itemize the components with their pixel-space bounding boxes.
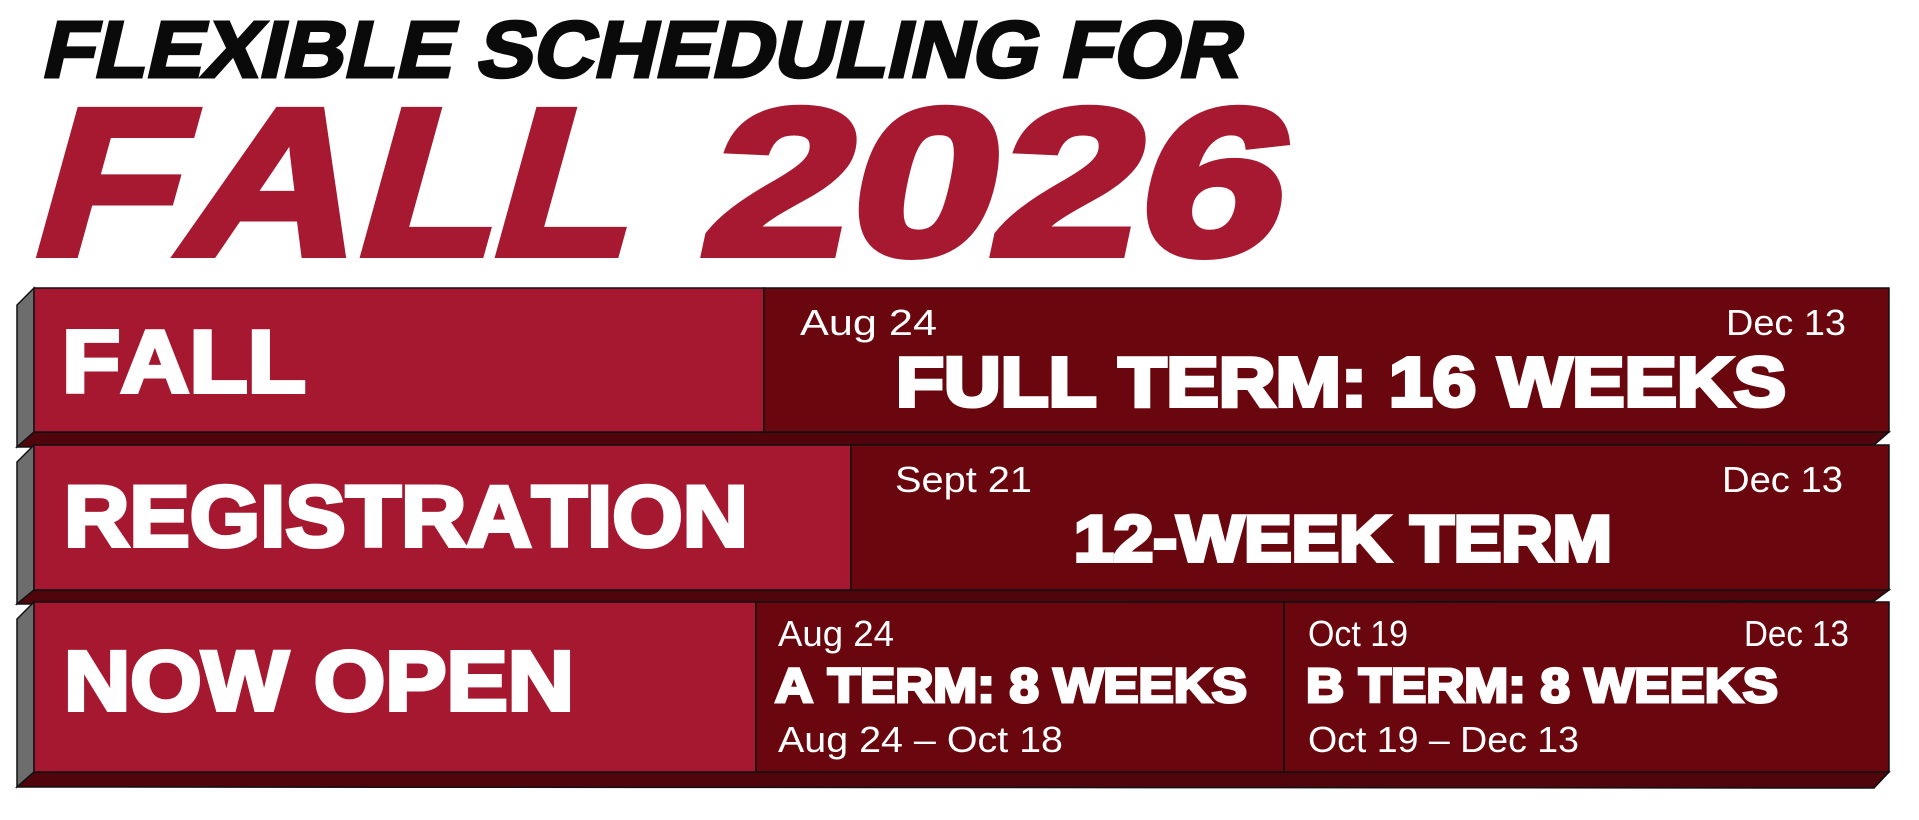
term block: a term: Aug 24 – Oct 18 (778, 719, 1063, 760)
label block: fall (34, 288, 764, 432)
term block: full term: Dec 13 (1726, 302, 1846, 343)
title: fall 2026 (14, 66, 1315, 299)
term block: full term: Aug 24 (800, 302, 937, 343)
label block: now open: NOW OPEN (64, 634, 574, 728)
title: flexible scheduling for: FLEXIBLE SCHEDULING FOR (36, 6, 1254, 95)
bar side and bottom faces (17, 602, 1889, 788)
term block: 12-week term: 12-WEEK TERM (1074, 502, 1612, 575)
title: fall 2026: L (473, 66, 674, 298)
term block: b term: Oct 19 – Dec 13 (1308, 719, 1579, 760)
bar side and bottom faces (17, 445, 1889, 604)
title: fall 2026: 2026 (688, 66, 1315, 299)
term block: a term (756, 602, 1284, 772)
bar side and bottom faces (17, 288, 1889, 447)
term block: 12-week term: Sept 21 (895, 459, 1032, 500)
term block: full term (764, 288, 1889, 432)
term block: b term: B TERM: 8 WEEKS (1306, 660, 1778, 713)
label block: fall: FALL (62, 312, 306, 411)
term block: a term: A TERM: 8 WEEKS (775, 660, 1247, 713)
term block: a term: Aug 24 (778, 613, 894, 654)
label block: now open (34, 602, 756, 772)
panel: fall row (17, 288, 1889, 447)
title: fall 2026: L (338, 66, 539, 298)
title: fall 2026: F (14, 66, 218, 298)
term block: b term: Oct 19 (1308, 613, 1408, 654)
label block: registration (34, 445, 851, 590)
term block: 12-week term (851, 445, 1889, 590)
term block: 12-week term: Dec 13 (1722, 459, 1843, 500)
panel: now open row (17, 602, 1889, 788)
panel: registration row (17, 445, 1889, 604)
term block: full term: FULL TERM: 16 WEEKS (896, 343, 1786, 421)
term block: b term (1284, 602, 1889, 772)
title: fall 2026: A (160, 66, 399, 298)
term block: b term: Dec 13 (1744, 613, 1849, 654)
label block: registration: REGISTRATION (64, 469, 748, 565)
